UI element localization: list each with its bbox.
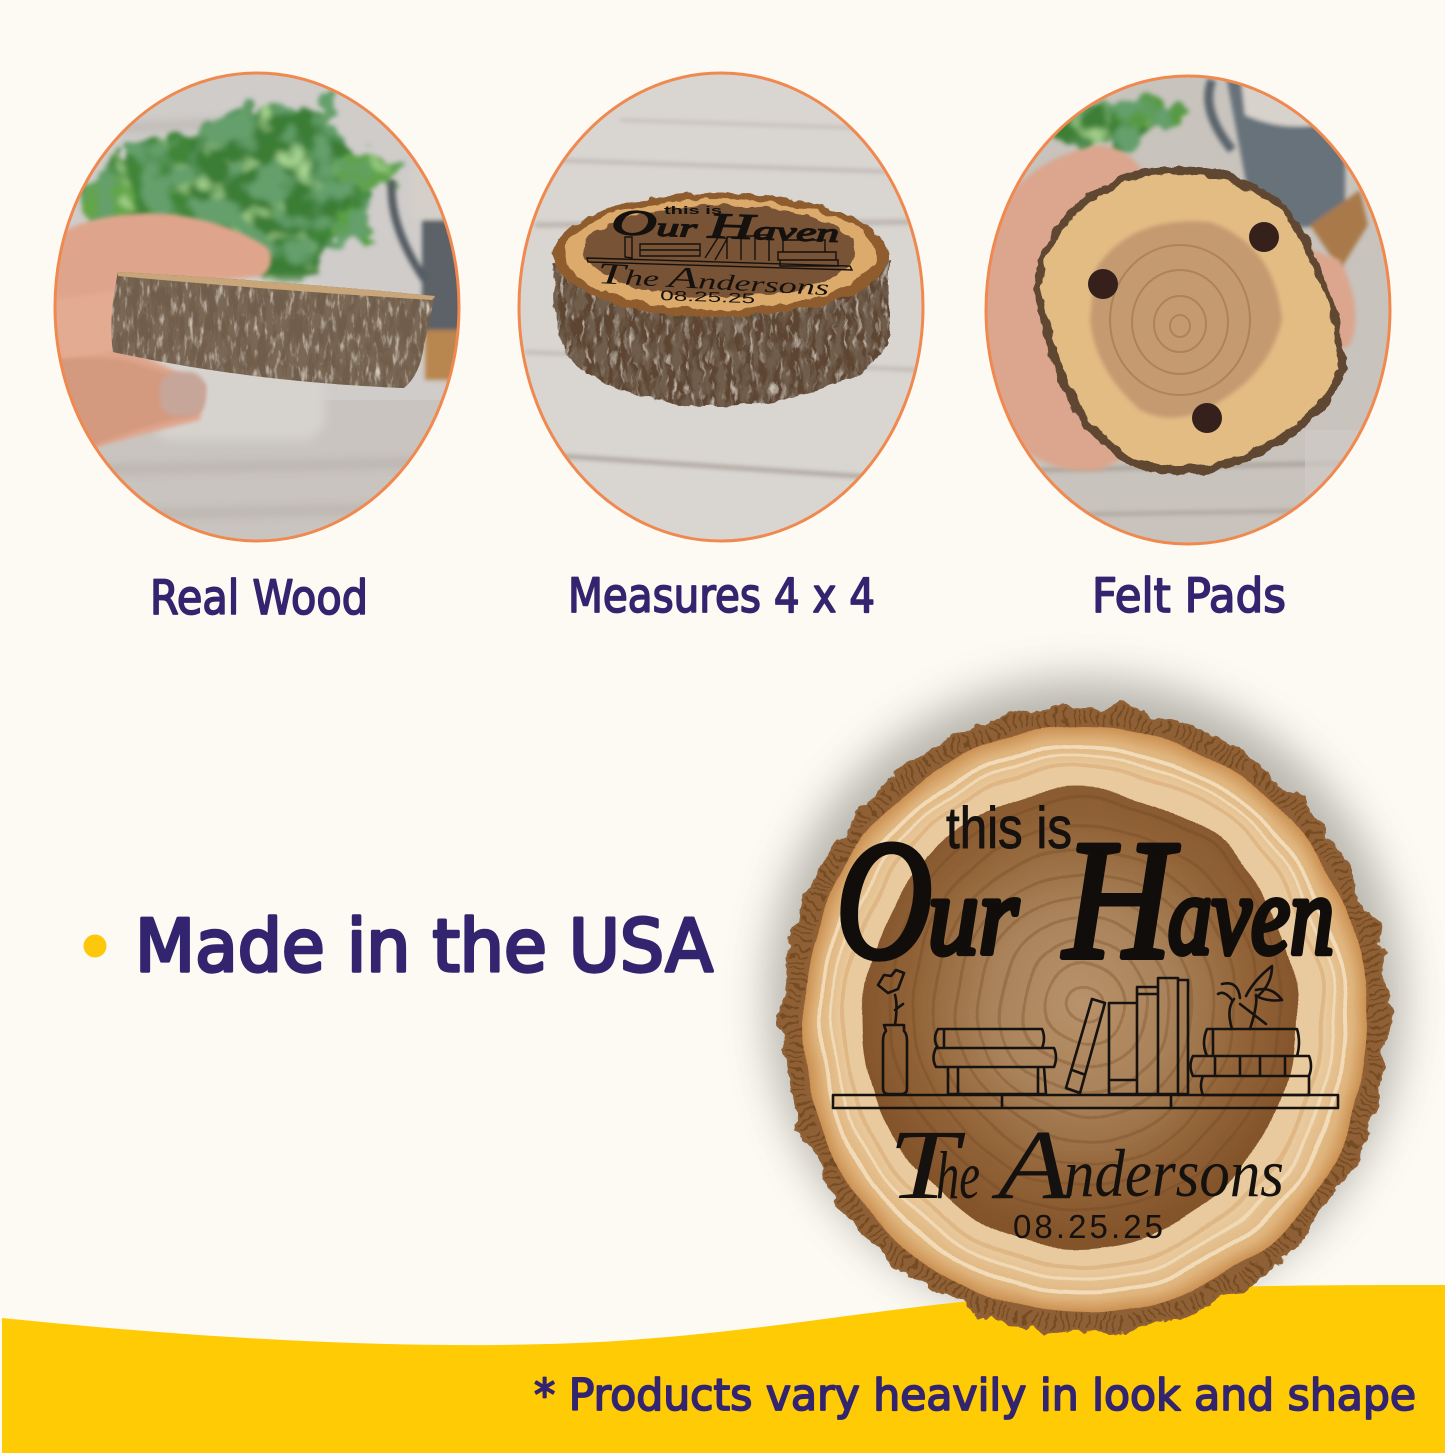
bark edge (782, 706, 1388, 1334)
felt pads (1088, 269, 1118, 299)
photo: real wood slab held in hand (50, 70, 465, 550)
engraving on log (597, 202, 840, 306)
engraved: the andersons: ndersons (1064, 1135, 1284, 1211)
plant behind (1045, 96, 1186, 147)
log side bark (552, 262, 890, 407)
oval border: real wood (55, 73, 459, 541)
engraved: the andersons (888, 1109, 1284, 1220)
engraved: the andersons: he (936, 1137, 980, 1213)
wood slab (111, 272, 435, 388)
oval border: measures (519, 73, 923, 541)
engraved: our haven: ur (928, 854, 1018, 978)
caption: real wood: Real Wood (150, 571, 368, 626)
caption: measures: Measures 4 x 4 (568, 569, 875, 624)
hand (980, 145, 1356, 471)
large engraved wood coaster (782, 706, 1388, 1334)
potted plant (80, 95, 397, 286)
engraved: our haven (836, 806, 1334, 994)
engraved: date: 08.25.25 (1013, 1208, 1163, 1245)
engraved: our haven: O (836, 806, 932, 994)
engraving on log: this is (664, 205, 722, 217)
wood coaster shadow (767, 678, 1403, 1322)
engraved: our haven: H (1062, 806, 1179, 994)
engraved: our haven: aven (1168, 854, 1334, 978)
slab back (1036, 167, 1348, 475)
bullet (84, 934, 106, 958)
photo: felt pads on the back of the slab (980, 70, 1395, 550)
sapwood (803, 727, 1367, 1313)
hand (50, 214, 271, 450)
engraved: this is: this is (946, 796, 1072, 861)
engraving on log: 08.25.25 (660, 287, 756, 306)
oval border: felt pads (986, 76, 1390, 544)
log top (552, 193, 888, 317)
mug (392, 165, 465, 380)
mug and coaster (1209, 70, 1368, 270)
engraved: bookshelf illustration (833, 966, 1338, 1108)
engraving on log: T he A ndersons (597, 257, 830, 302)
engraved: the andersons: T (888, 1109, 966, 1220)
caption: felt pads: Felt Pads (1092, 569, 1286, 624)
heartwood rings (1090, 221, 1282, 418)
engraving on log: O ur H aven (611, 202, 840, 250)
heartwood (864, 790, 1296, 1250)
heading: made in the usa: Made in the USA (135, 904, 713, 988)
footnote: * Products vary heavily in look and shape (534, 1370, 1416, 1421)
photo: engraved log measuring 4 x 4 (510, 70, 930, 550)
planter (150, 280, 325, 440)
growth rings (890, 800, 1280, 1210)
yellow wave footer (2, 1285, 1445, 1453)
engraved: the andersons: A (991, 1109, 1071, 1220)
